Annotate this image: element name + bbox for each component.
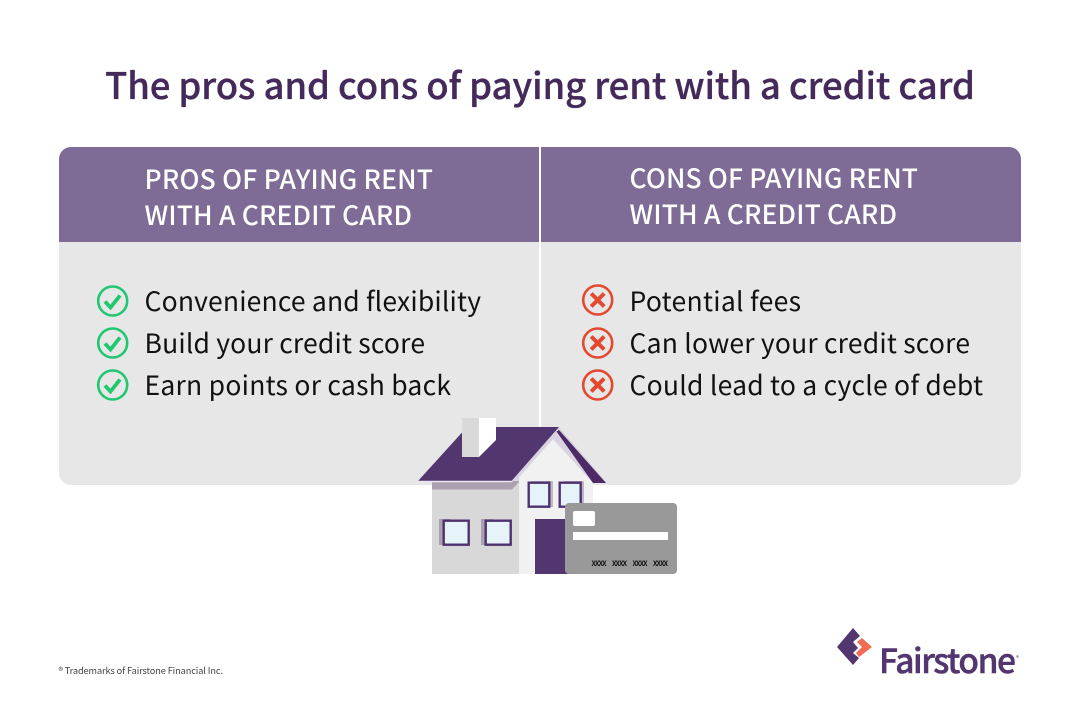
illustration: house and credit card: [418, 418, 677, 574]
icon: logo diamond: [837, 628, 872, 665]
heading: cons: WITH A CREDIT CARD: [630, 193, 897, 232]
logo: Fairstone: ®: [1016, 653, 1019, 662]
list: pros items: Earn points or cash back: [144, 364, 451, 403]
icon: credit card: XXXX: [653, 559, 669, 569]
icon: x marks: [583, 286, 612, 400]
heading: pros: PROS OF PAYING RENT: [144, 158, 433, 197]
heading: pros: [144, 158, 433, 233]
icon: house: [418, 418, 607, 574]
icon: credit card: XXXX: [592, 559, 607, 569]
list: cons items: [630, 280, 983, 403]
heading: cons: [630, 157, 918, 232]
panel: cons: [583, 157, 983, 403]
list: pros items: [144, 280, 481, 403]
icon: credit card: XXXX: [612, 559, 628, 569]
panel: comparison table: [59, 147, 1021, 485]
list: cons items: Potential fees: [630, 280, 801, 319]
heading: cons: CONS OF PAYING RENT: [630, 157, 918, 196]
list: pros items: Convenience and flexibility: [144, 280, 481, 319]
icon: credit card: [565, 503, 677, 574]
icon: check marks: [98, 286, 127, 400]
list: cons items: Could lead to a cycle of debt: [630, 364, 983, 403]
footnote: ® Trademarks of Fairstone Financial Inc.: [58, 663, 223, 677]
list: cons items: Can lower your credit score: [630, 322, 970, 361]
icon: credit card: XXXX: [632, 559, 648, 569]
list: pros items: Build your credit score: [144, 322, 425, 361]
heading: pros: WITH A CREDIT CARD: [144, 194, 412, 233]
logo: Fairstone: [837, 628, 1019, 683]
panel: pros: [98, 158, 481, 403]
logo wordmark: Fairstone: [879, 634, 1016, 683]
title: The pros and cons of paying rent with a credit card: [105, 57, 975, 110]
